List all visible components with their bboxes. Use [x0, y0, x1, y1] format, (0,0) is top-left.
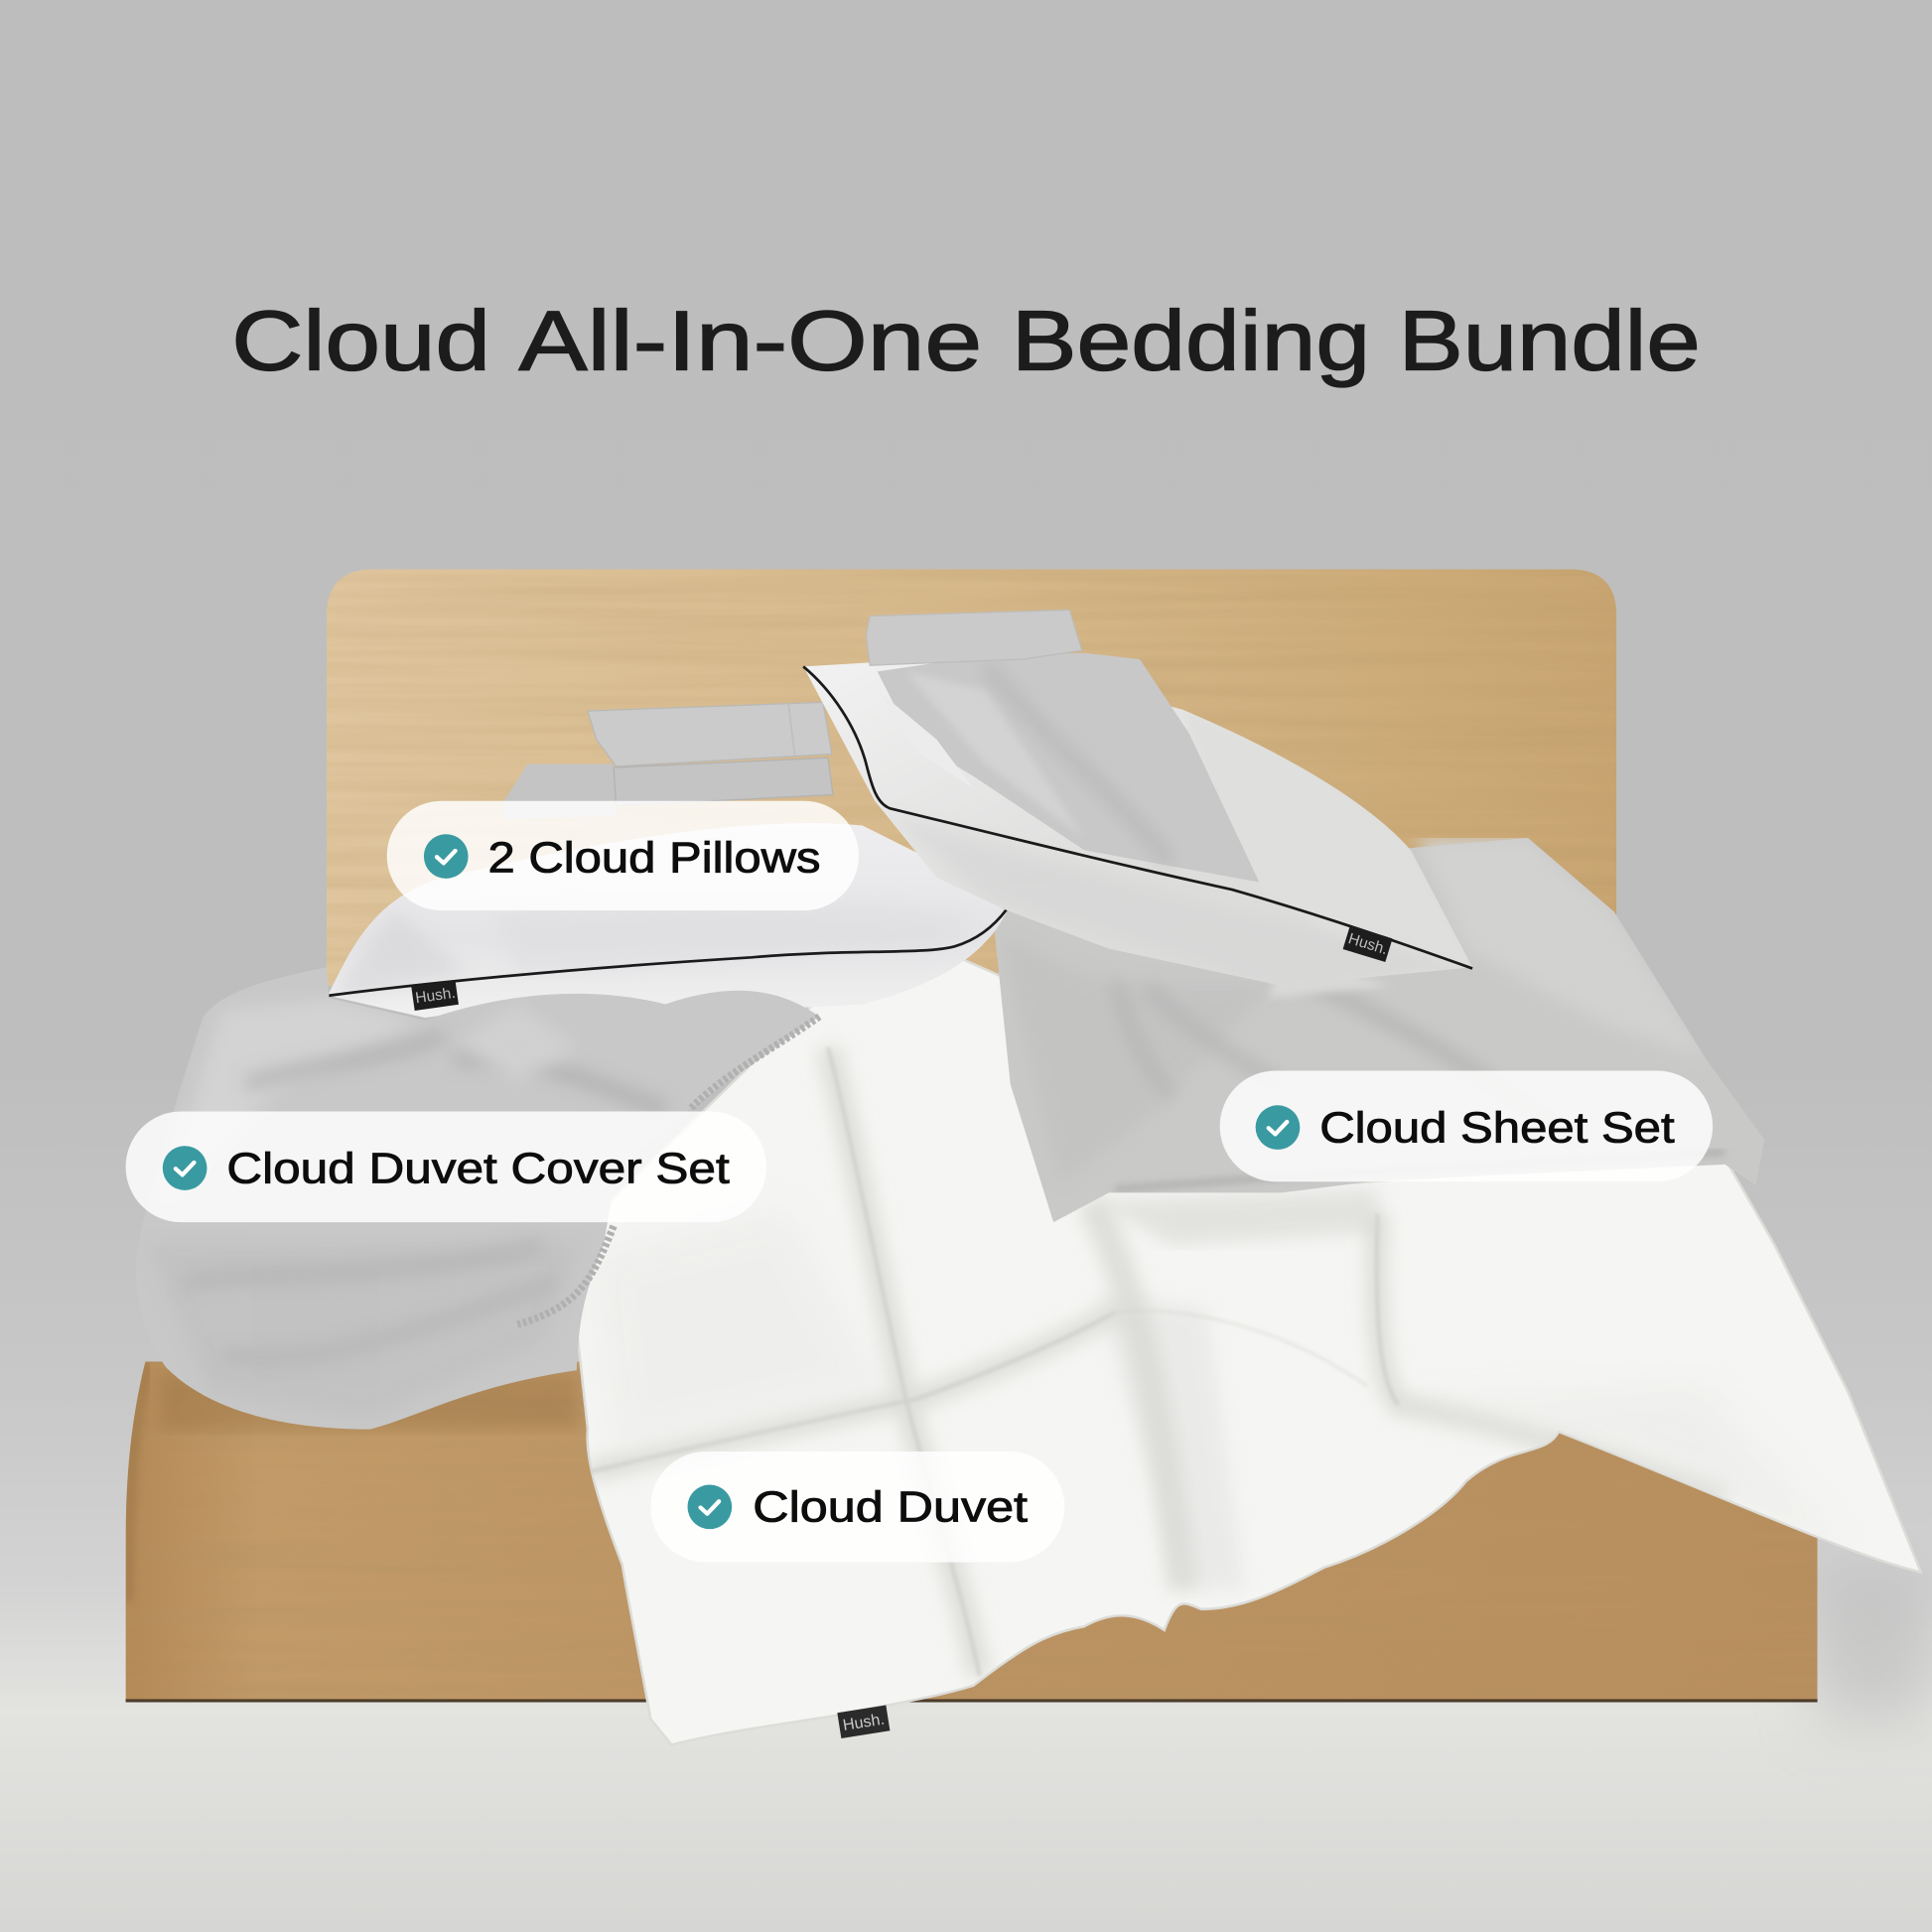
duvet tag: Hush.: [842, 1711, 886, 1734]
piping: [329, 909, 1007, 996]
duvet: [574, 959, 1921, 1744]
pillow tag: [411, 980, 459, 1011]
bed base: [123, 1355, 1824, 1703]
icon: check: [688, 1484, 732, 1529]
lower folded pillowcase: [614, 758, 833, 806]
label: Cloud Duvet: [650, 1451, 1064, 1563]
folded pillowcases and sheet stack: [502, 702, 833, 819]
elastic edges: [690, 1017, 819, 1109]
pillow tag: Hush.: [414, 985, 457, 1007]
folded pillowcase on top: [866, 610, 1082, 665]
duvet tag: [837, 1705, 890, 1738]
label: Cloud Duvet Cover Set: [126, 1111, 766, 1222]
title: All-In-One: [518, 293, 982, 388]
pillow tag: [1343, 925, 1393, 962]
title: Cloud: [231, 293, 490, 388]
grey pillowcase draped on pillow: [878, 653, 1259, 883]
title: Bedding: [1012, 293, 1370, 388]
duvet cover, grey draped at right: [992, 838, 1764, 1222]
duvet soft puff shading: [588, 1047, 1725, 1676]
title: Bundle: [1399, 293, 1701, 388]
label: Cloud Sheet Set: [1220, 1070, 1713, 1181]
piping: [803, 666, 1472, 968]
bed frame: [123, 567, 1824, 1703]
floor shadow under the duvet: [1811, 1565, 1932, 1725]
title: [231, 293, 1701, 388]
label: 2 Cloud Pillows: [387, 801, 859, 910]
pillow, lower left: [328, 823, 1007, 1018]
label: Cloud Sheet Set: Cloud Sheet Set: [1319, 1104, 1675, 1152]
folded sheet behind the stack: [502, 763, 617, 819]
label: Cloud Duvet: Cloud Duvet: [753, 1484, 1028, 1532]
label: Cloud Duvet Cover Set: Cloud Duvet Cover Set: [226, 1145, 730, 1192]
pillow, upper right: [803, 610, 1472, 986]
duvet seams: [588, 1047, 1399, 1676]
fitted sheet, grey at left: [136, 967, 819, 1430]
upper folded pillowcase: [588, 702, 832, 766]
headboard: [327, 567, 1616, 992]
icon: check: [163, 1146, 207, 1190]
label: 2 Cloud Pillows: 2 Cloud Pillows: [487, 835, 821, 883]
pillow tag: Hush.: [1346, 930, 1390, 958]
icon: check: [424, 834, 469, 879]
icon: check: [1256, 1105, 1300, 1150]
